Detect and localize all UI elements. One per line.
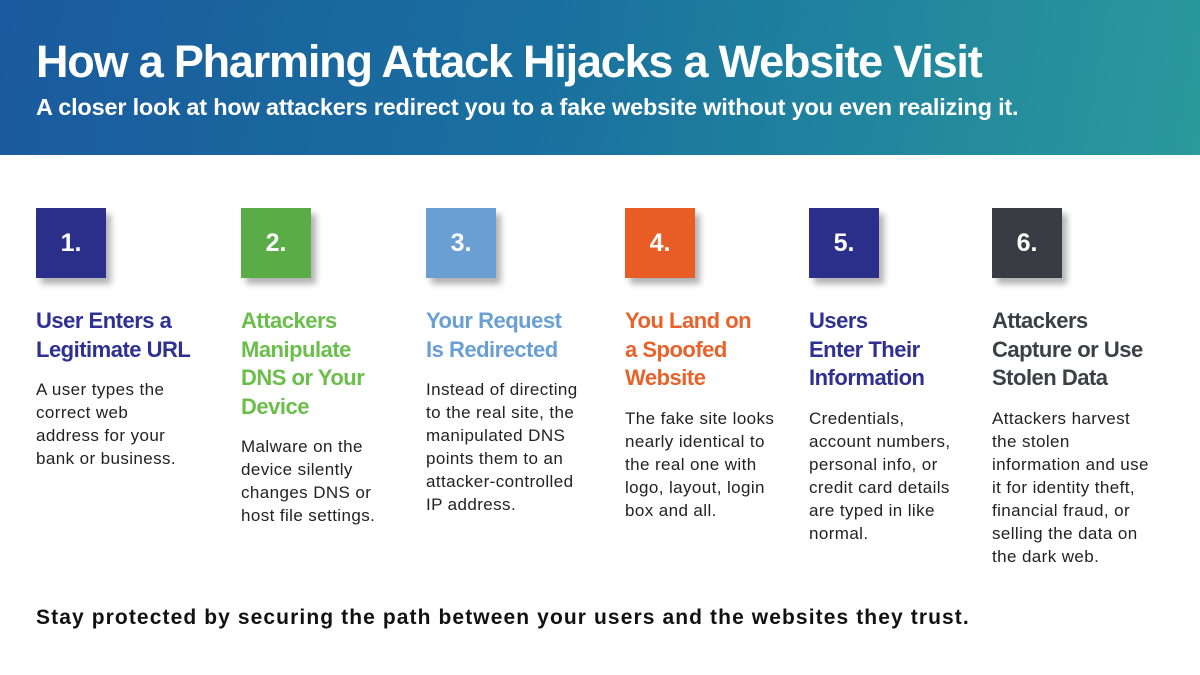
heading 6 bbox=[992, 308, 1143, 390]
text 3: IP address. bbox=[426, 495, 516, 514]
step 4 bbox=[625, 208, 774, 520]
text 1: correct web bbox=[36, 403, 128, 422]
text 6: financial fraud, or bbox=[992, 500, 1130, 520]
text 5: Credentials, bbox=[809, 408, 905, 428]
badge 5 bbox=[809, 208, 879, 278]
badge 3 bbox=[426, 208, 496, 278]
heading 2: Manipulate bbox=[241, 336, 351, 362]
text 6: information and use bbox=[992, 454, 1149, 474]
heading 6: Stolen Data bbox=[992, 365, 1108, 390]
heading 2: Device bbox=[241, 394, 309, 418]
text 4: box and all. bbox=[625, 500, 717, 520]
text 3: attacker-controlled bbox=[426, 472, 573, 491]
heading 2 bbox=[241, 308, 364, 418]
heading 4 bbox=[625, 308, 751, 390]
badge 3: 3. bbox=[451, 228, 471, 256]
badge 6: 6. bbox=[1017, 228, 1037, 256]
badge 5: 5. bbox=[834, 228, 854, 256]
text 2: host file settings. bbox=[241, 506, 375, 525]
heading 3 bbox=[426, 308, 562, 362]
badge 1 bbox=[36, 208, 106, 278]
heading 4: a Spoofed bbox=[625, 336, 727, 362]
title: How a Pharming Attack Hijacks a Website Visit bbox=[36, 36, 982, 87]
text 5: credit card details bbox=[809, 478, 950, 496]
heading 2: Attackers bbox=[241, 308, 337, 333]
text 3: points them to an bbox=[426, 449, 563, 468]
step 2 bbox=[241, 208, 375, 525]
badge 2: 2. bbox=[266, 228, 286, 256]
text 5 bbox=[809, 408, 951, 542]
text 3: manipulated DNS bbox=[426, 426, 565, 445]
heading 5: Information bbox=[809, 365, 924, 390]
badge 4: 4. bbox=[650, 228, 670, 256]
text 2: device silently bbox=[241, 460, 353, 479]
subtitle: A closer look at how attackers redirect you to a fake website without you even realizing it. bbox=[36, 94, 1018, 120]
text 5: normal. bbox=[809, 524, 868, 542]
text 6: it for identity theft, bbox=[992, 478, 1135, 496]
heading 3: Is Redirected bbox=[426, 336, 558, 362]
heading 4: You Land on bbox=[625, 308, 751, 333]
text 2 bbox=[241, 437, 375, 525]
heading 2: DNS or Your bbox=[241, 365, 364, 390]
heading 6: Capture or Use bbox=[992, 336, 1143, 362]
text 1: address for your bbox=[36, 426, 165, 445]
step 5 bbox=[809, 208, 951, 542]
text 5: account numbers, bbox=[809, 432, 951, 450]
heading 1 bbox=[36, 308, 190, 362]
text 4: logo, layout, login bbox=[625, 478, 765, 496]
badge 4 bbox=[625, 208, 695, 278]
header banner bbox=[0, 0, 1200, 155]
text 4: The fake site looks bbox=[625, 408, 774, 428]
text 6: Attackers harvest bbox=[992, 408, 1130, 428]
heading 1: Legitimate URL bbox=[36, 336, 190, 362]
text 3 bbox=[426, 380, 578, 514]
heading 6: Attackers bbox=[992, 308, 1088, 333]
text 5: are typed in like bbox=[809, 500, 935, 520]
text 6: the stolen bbox=[992, 432, 1070, 450]
badge 2 bbox=[241, 208, 311, 278]
text 4: the real one with bbox=[625, 454, 757, 474]
text 4: nearly identical to bbox=[625, 432, 765, 450]
text 6 bbox=[992, 408, 1149, 566]
heading 1: User Enters a bbox=[36, 308, 171, 333]
heading 5: Users bbox=[809, 308, 868, 333]
text 6: selling the data on bbox=[992, 524, 1138, 542]
heading 5 bbox=[809, 308, 924, 390]
heading 5: Enter Their bbox=[809, 336, 920, 362]
text 1 bbox=[36, 380, 176, 468]
heading 3: Your Request bbox=[426, 308, 561, 333]
text 1: bank or business. bbox=[36, 449, 176, 468]
step 1 bbox=[36, 208, 190, 468]
badge 1: 1. bbox=[61, 228, 81, 256]
text 3: Instead of directing bbox=[426, 380, 578, 399]
footer callout: Stay protected by securing the path between your users and the websites they trust. bbox=[36, 606, 970, 629]
text 5: personal info, or bbox=[809, 454, 938, 474]
badge 6 bbox=[992, 208, 1062, 278]
step 6 bbox=[992, 208, 1149, 566]
heading 4: Website bbox=[625, 365, 705, 390]
text 1: A user types the bbox=[36, 380, 164, 399]
text 3: to the real site, the bbox=[426, 403, 574, 422]
text 2: changes DNS or bbox=[241, 483, 371, 502]
step 3 bbox=[426, 208, 578, 514]
text 4 bbox=[625, 408, 774, 520]
text 6: the dark web. bbox=[992, 546, 1099, 566]
text 2: Malware on the bbox=[241, 437, 363, 456]
